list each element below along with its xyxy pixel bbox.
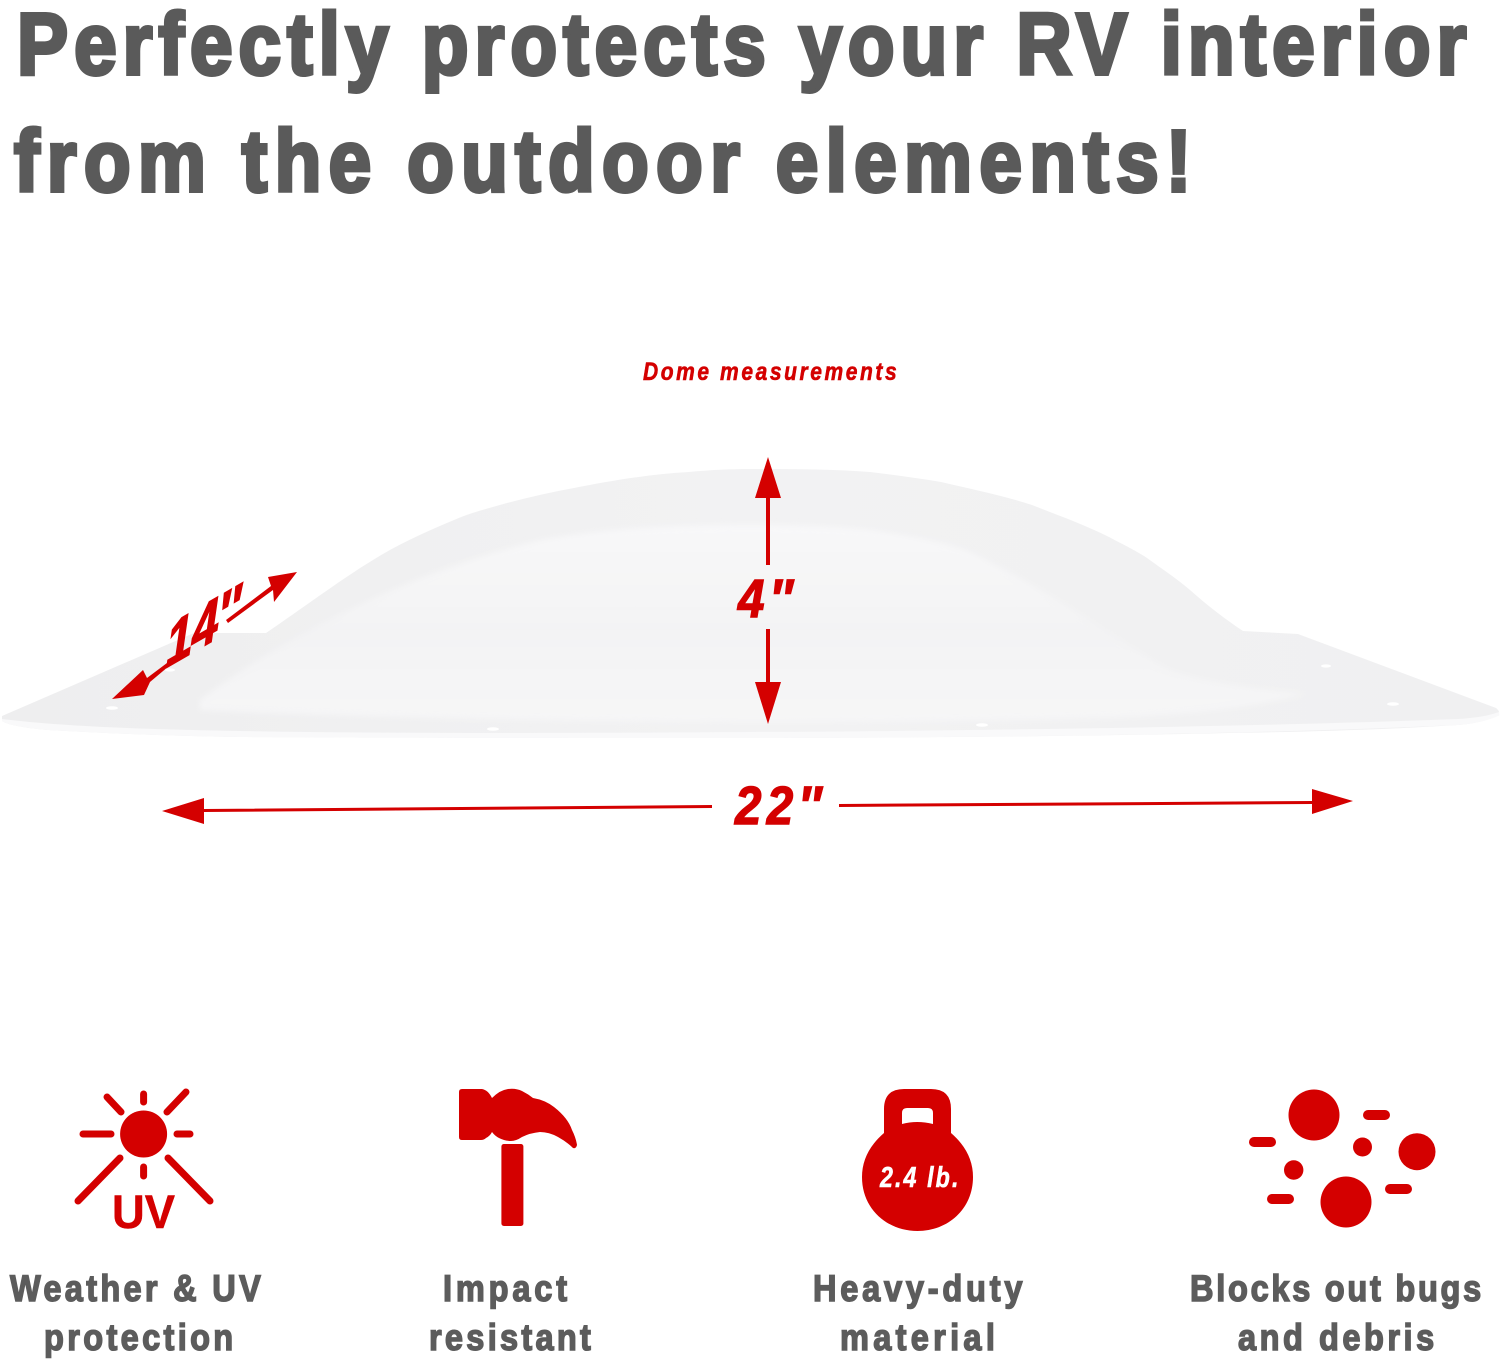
caption: dome measurements: Dome measurements bbox=[643, 357, 897, 385]
dome product image bbox=[2, 469, 1499, 738]
label: and debris bbox=[1238, 1317, 1434, 1358]
label: material bbox=[840, 1317, 995, 1358]
feature: blocks out bugs and debris bbox=[1190, 1090, 1481, 1358]
arrow up bbox=[755, 457, 781, 565]
feature: heavy-duty material bbox=[813, 1089, 1023, 1358]
arrow left bbox=[162, 798, 712, 824]
icon: UV sun bbox=[78, 1092, 210, 1238]
label: Weather & UV bbox=[10, 1268, 261, 1309]
dome inner surface bbox=[200, 525, 1305, 722]
icon: UV sun: UV bbox=[112, 1185, 176, 1238]
title: from the outdoor elements! bbox=[14, 113, 1191, 210]
height value: 4″ bbox=[737, 568, 795, 629]
label bbox=[429, 1268, 591, 1358]
measurement: 22 inch width bbox=[162, 775, 1353, 836]
feature: weather and UV protection bbox=[10, 1092, 261, 1358]
arrow lower left bbox=[112, 663, 169, 699]
label: Blocks out bugs bbox=[1190, 1268, 1481, 1309]
label: Impact bbox=[443, 1268, 567, 1309]
depth value: 14″ bbox=[166, 570, 243, 682]
label: protection bbox=[44, 1317, 233, 1358]
arrow down bbox=[755, 629, 781, 724]
arrow upper right bbox=[226, 572, 297, 623]
label: resistant bbox=[429, 1317, 591, 1358]
icon: hammer bbox=[459, 1089, 577, 1226]
measurement: 4 inch height bbox=[737, 457, 795, 724]
arrow right bbox=[839, 789, 1353, 814]
width value: 22″ bbox=[734, 775, 824, 836]
label: Heavy-duty bbox=[813, 1268, 1023, 1309]
icon: kettlebell weight: 2.4 lb. bbox=[879, 1160, 958, 1194]
title bbox=[14, 0, 1466, 210]
dome flange and outer shell bbox=[2, 469, 1499, 738]
feature: impact resistant bbox=[429, 1089, 591, 1358]
dome bottom rim bbox=[2, 712, 1499, 738]
label bbox=[813, 1268, 1023, 1358]
mounting holes bbox=[106, 664, 1399, 731]
icon: debris particles bbox=[1249, 1090, 1436, 1228]
label bbox=[10, 1268, 261, 1358]
measurement: 14 inch depth bbox=[112, 570, 297, 699]
label bbox=[1190, 1268, 1481, 1358]
icon: kettlebell weight bbox=[862, 1089, 973, 1231]
